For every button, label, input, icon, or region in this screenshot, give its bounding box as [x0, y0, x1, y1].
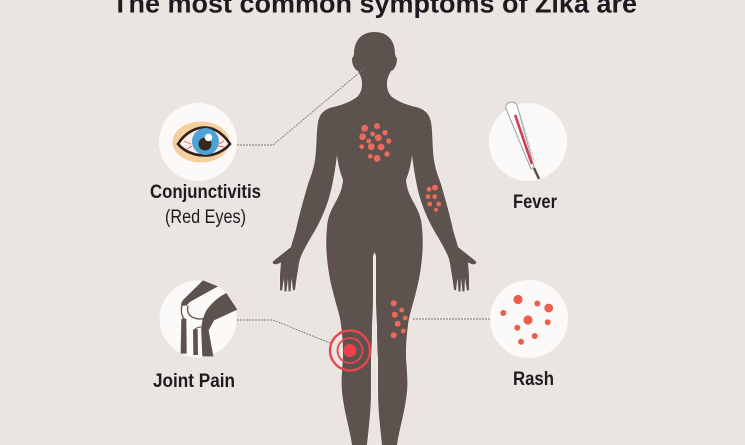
- torso rash: [359, 123, 391, 162]
- label: rash: Rash: [513, 368, 554, 390]
- leader line: eye: [237, 67, 366, 145]
- label: fever: Fever: [513, 191, 557, 213]
- icon: rash: [490, 280, 568, 358]
- leader line: rash: [413, 318, 491, 320]
- icon: thermometer: [489, 102, 567, 181]
- label: conjunctivitis: Conjunctivitis: [150, 181, 261, 203]
- leg rash: [391, 300, 408, 338]
- label: joint pain: Joint Pain: [153, 370, 235, 392]
- icon: eye: [159, 103, 237, 181]
- label: red eyes: (Red Eyes): [165, 207, 246, 228]
- icon: knee joint: [160, 280, 237, 358]
- body silhouette: [272, 32, 476, 445]
- arm rash: [426, 185, 441, 212]
- joint pain target: [330, 330, 370, 370]
- leader line: knee: [237, 320, 330, 343]
